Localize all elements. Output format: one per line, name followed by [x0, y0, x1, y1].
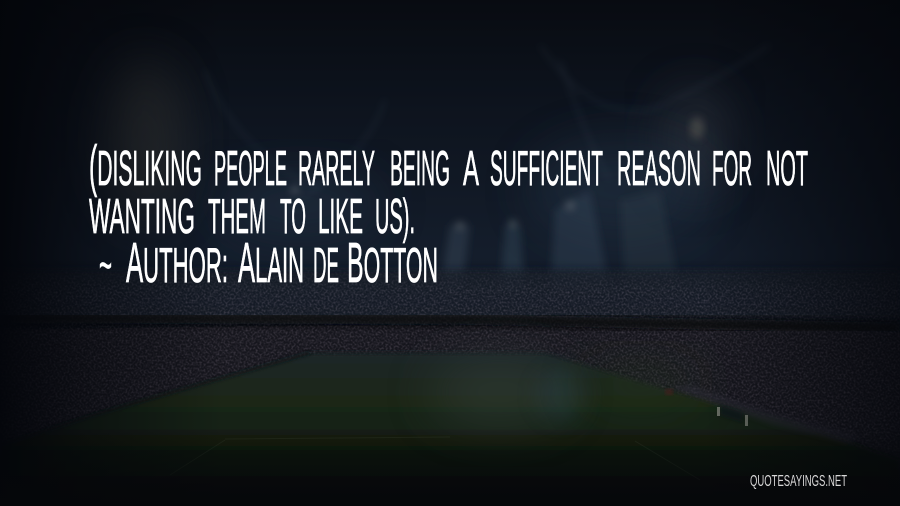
- quote line 2: THEM: [208, 190, 266, 244]
- quote line 1: [89, 134, 808, 198]
- author attribution: [99, 231, 438, 295]
- author attribution: ~: [99, 239, 112, 293]
- quote text: [89, 134, 808, 295]
- quote line 2: WANTING: [89, 190, 195, 244]
- author attribution: AUTHOR:: [126, 231, 228, 295]
- stadium roof glow and floodlights: [107, 45, 770, 240]
- quote line 1: FOR: [712, 142, 752, 196]
- goal and advertising boards on the right: [665, 385, 860, 444]
- infographic canvas: NOT: [766, 142, 808, 196]
- quote line 2: LIKE: [318, 190, 363, 244]
- quote line 1: SUFFICIENT: [490, 142, 603, 196]
- quote line 2: TO: [280, 190, 306, 244]
- crowd stands: [20, 267, 900, 452]
- quote text: US).: [375, 190, 415, 244]
- quote line 1: BEING: [390, 142, 450, 196]
- author attribution: ALAIN: [238, 231, 304, 295]
- light shafts above the stands: [291, 186, 680, 290]
- quote line 1: A: [463, 142, 479, 196]
- quote line 1: PEOPLE: [214, 142, 287, 196]
- football pitch: [0, 353, 900, 506]
- quote line 1: REASON: [617, 142, 701, 196]
- quote text: BOTTON: [347, 231, 438, 295]
- quote line 1: RARELY: [298, 142, 375, 196]
- author attribution: DE: [313, 239, 339, 293]
- quote line 1: (DISLIKING: [89, 134, 202, 198]
